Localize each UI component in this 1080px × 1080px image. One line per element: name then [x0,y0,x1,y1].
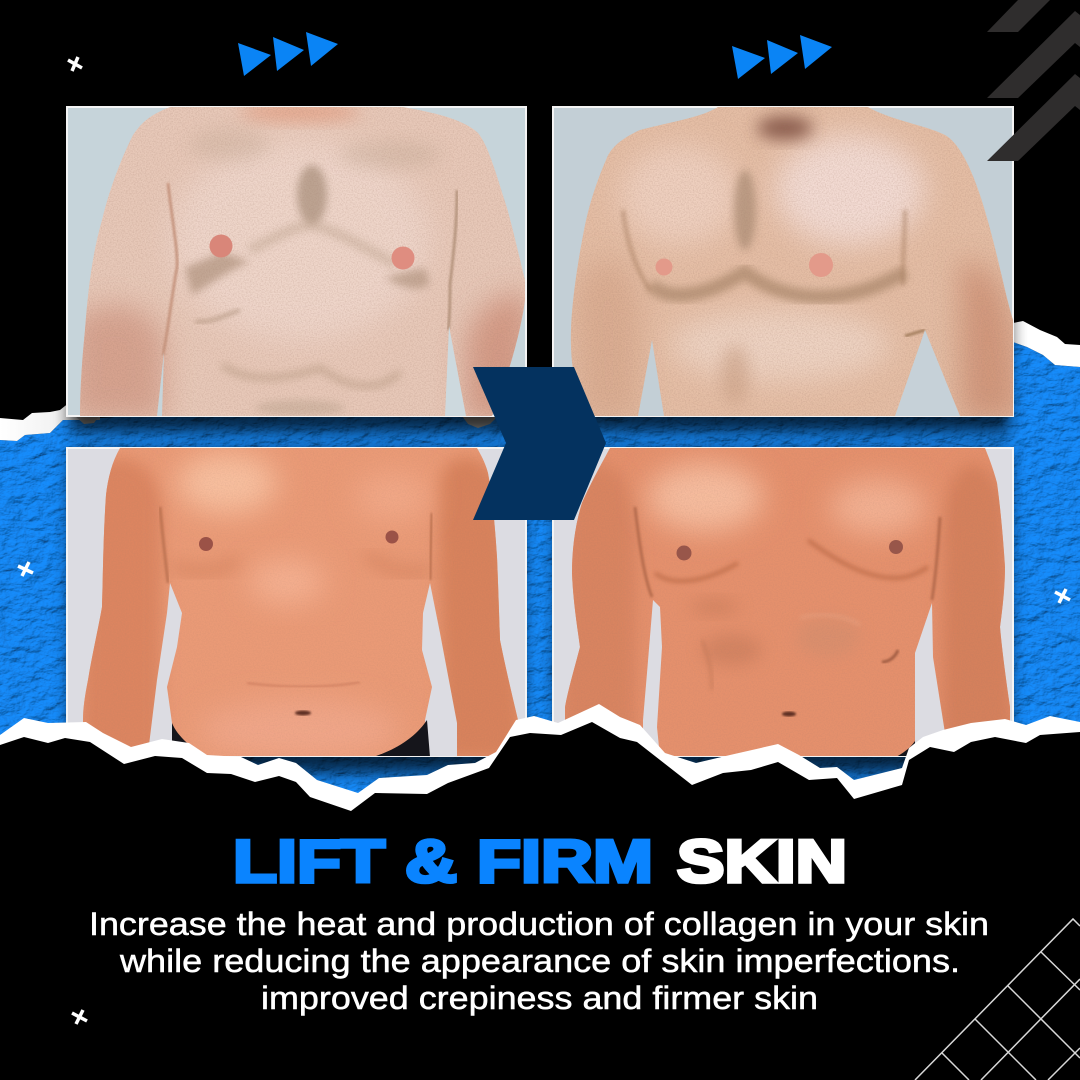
centre chevron arrow [473,367,606,520]
photo frame and backdrop [67,448,526,756]
body line 3: improved crepiness and firmer skin [261,980,818,1016]
torn white paper edge: right [1000,321,1080,367]
black lower panel [0,722,1080,1080]
decoration: white line grid bottom right [915,919,1080,1080]
photo frame and backdrop [553,107,1013,416]
photo: before belly, bottom left [60,440,530,760]
nipple right [386,530,398,544]
nipple left [199,537,213,551]
nipple right [889,540,903,554]
torso figure before [80,107,525,416]
torn paper scraps under top photos [75,416,498,428]
photo: after chest, top right [550,100,1020,420]
torn white paper edge: bottom [0,704,1080,830]
navel [295,710,311,716]
torso figure after [550,440,1020,760]
gaps between arms and torso [149,583,457,757]
top arrows right [732,35,832,79]
photo frame and backdrop [553,448,1013,756]
torso figure before [83,448,518,756]
nipple left [210,234,232,258]
torn white paper edge: left [0,398,100,441]
nipple right [809,253,833,277]
heading: white part: SKIN [677,828,847,895]
nipple right [392,246,414,270]
gaps between arms and torso [157,352,164,416]
black underwear [898,741,915,756]
textured blue torn band [0,330,1080,820]
nipple left [676,546,692,560]
photo: after abs, bottom right [550,440,1020,760]
torso figure after [550,100,1020,420]
body line 1: Increase the heat and production of collagen in your skin [89,906,989,942]
heading [233,828,847,895]
black underwear [172,720,430,757]
top arrows left [238,32,338,76]
heading: blue part: LIFT & FIRM [233,828,653,895]
navel [782,712,796,716]
nipple left [656,258,672,276]
photo shadows on the blue band [70,110,1010,773]
photo: before chest, top left [60,100,540,420]
gaps between arms and torso [638,340,664,416]
gaps between arms and torso [643,600,945,757]
body copy [89,906,989,1016]
photo frame and backdrop [67,107,526,416]
body line 2: while reducing the appearance of skin imperfections. [119,943,960,979]
decoration: dark grey chevrons top right [987,0,1080,161]
